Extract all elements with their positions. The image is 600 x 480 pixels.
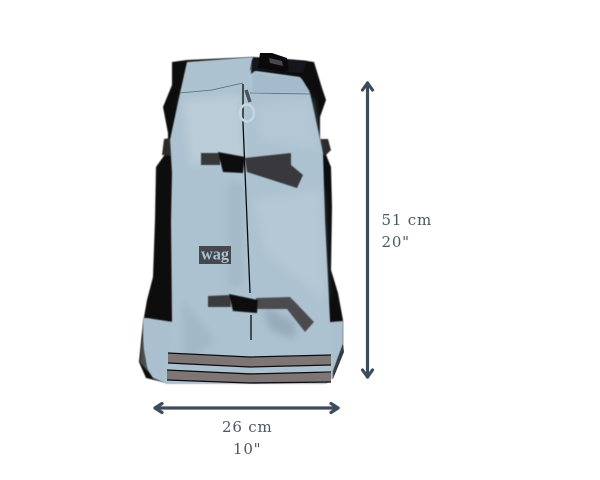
fabric shading bbox=[182, 95, 325, 372]
width label: 10" bbox=[233, 440, 261, 458]
top fold seam bbox=[180, 83, 310, 94]
side strap tabs bbox=[162, 138, 331, 156]
width label: 26 cm bbox=[222, 418, 272, 436]
reflective stripes bbox=[167, 353, 331, 383]
upper strap with buckle bbox=[201, 152, 303, 188]
bottom panel right bbox=[318, 321, 343, 382]
bottom panel left bbox=[143, 318, 180, 383]
lower strap with buckle bbox=[208, 294, 314, 332]
height label: 51 cm bbox=[382, 211, 432, 229]
centre zipper bbox=[243, 84, 251, 340]
height label bbox=[382, 211, 432, 251]
top flap shadow bbox=[250, 57, 310, 93]
top buckle bbox=[258, 53, 289, 72]
bottom left dark sliver bbox=[140, 334, 148, 372]
bottom right dark sliver bbox=[331, 344, 344, 379]
height label: 20" bbox=[382, 233, 410, 251]
width arrow bbox=[155, 404, 338, 412]
width label bbox=[222, 418, 272, 458]
wag logo patch: wag bbox=[201, 244, 229, 264]
backpack black body and mesh sides bbox=[139, 57, 343, 383]
light blue front panel bbox=[165, 57, 333, 384]
backpack bbox=[139, 53, 344, 384]
height arrow bbox=[362, 83, 372, 377]
zipper pull ring bbox=[240, 90, 254, 122]
top strap bbox=[251, 57, 307, 74]
